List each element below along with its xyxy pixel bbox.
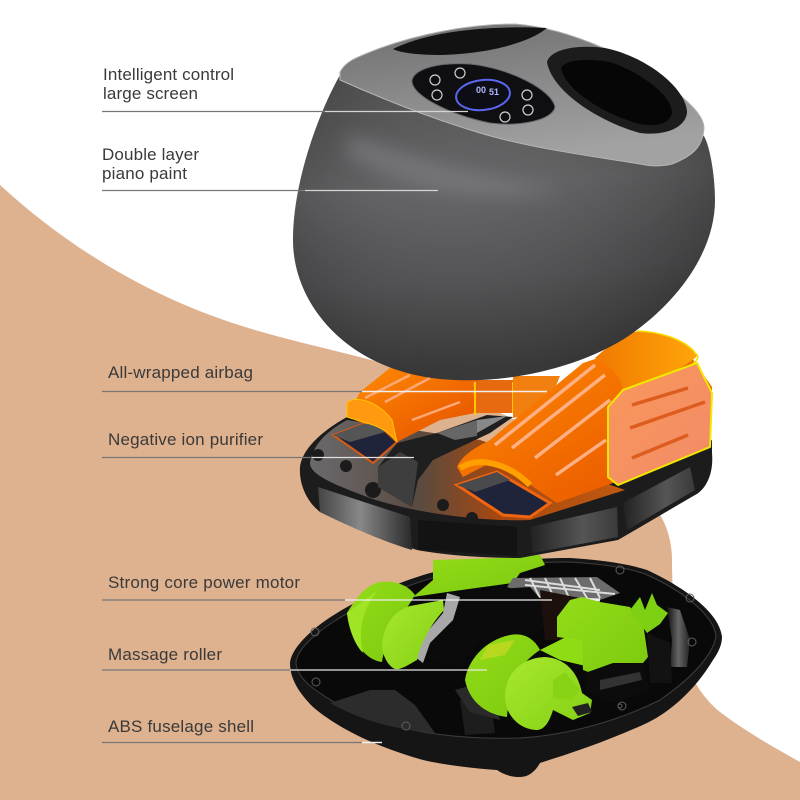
airbag bucket top: [595, 331, 698, 390]
centre airbag strip: [473, 380, 513, 413]
time readout: 00: [476, 85, 486, 95]
side airbag panel: [608, 363, 712, 485]
background: tan curved shape: [0, 185, 800, 800]
callout: intelligent control large screen: [102, 65, 468, 112]
foot opening back: [393, 27, 547, 55]
callout: intelligent control large screen: Intelligent control: [103, 65, 234, 84]
callout: double layer piano paint: Double layer: [102, 145, 199, 164]
callout: negative ion purifier: Negative ion purifier: [108, 430, 263, 449]
shell base: [290, 558, 722, 777]
rim segment right: [530, 507, 618, 553]
shell floor highlights: [330, 690, 435, 733]
shell interior: [296, 562, 716, 738]
rim segment left: [318, 487, 412, 550]
negative ion purifier block: [378, 415, 513, 507]
callout: all-wrapped airbag: All-wrapped airbag: [108, 363, 253, 382]
upper massager casing: [293, 24, 715, 380]
motor block: [417, 587, 550, 667]
left roller two: [382, 600, 444, 669]
right roller shaft: [540, 630, 590, 667]
callout: double layer piano paint: [102, 145, 438, 190]
gear assembly: [507, 577, 620, 607]
lower shell with rollers: [290, 555, 722, 777]
sensor window right: [457, 472, 550, 517]
buttons: [430, 68, 533, 122]
right airbag: [457, 345, 712, 503]
callout: double layer piano paint: piano paint: [102, 164, 187, 183]
control panel: 51: [489, 87, 499, 97]
left airbag: [347, 368, 475, 442]
lid top: [340, 24, 704, 166]
roller fingers: [630, 593, 668, 633]
casing soft highlight: [345, 135, 565, 195]
rim segment far right: [623, 467, 695, 530]
right post: [647, 633, 672, 683]
front roller two: [505, 657, 592, 730]
back green roller: [413, 555, 545, 597]
plate top: [310, 420, 625, 520]
plate rim underside: [300, 417, 712, 558]
rim segment centre: [418, 520, 517, 556]
front roller one: [465, 634, 540, 717]
callout: ABS fuselage shell: ABS fuselage shell: [108, 717, 254, 736]
housing block: [585, 663, 650, 703]
roller shaft end: [572, 703, 592, 716]
panel oval: [412, 64, 555, 124]
screws: [312, 449, 478, 524]
callout: massage roller: Massage roller: [108, 645, 222, 664]
control panel: [412, 64, 555, 124]
callout: strong core power motor: Strong core power motor: [108, 573, 300, 592]
sensor window left: [333, 420, 397, 463]
callout: intelligent control large screen: large screen: [103, 84, 198, 103]
display ring: [455, 77, 511, 113]
right block: [557, 597, 648, 680]
foot groove highlights: [495, 365, 610, 475]
foot opening front: [547, 47, 687, 134]
motor silver band: [415, 593, 460, 663]
left roller one: [347, 582, 415, 662]
middle plate with airbags: [300, 331, 712, 558]
casing body: [293, 75, 715, 380]
